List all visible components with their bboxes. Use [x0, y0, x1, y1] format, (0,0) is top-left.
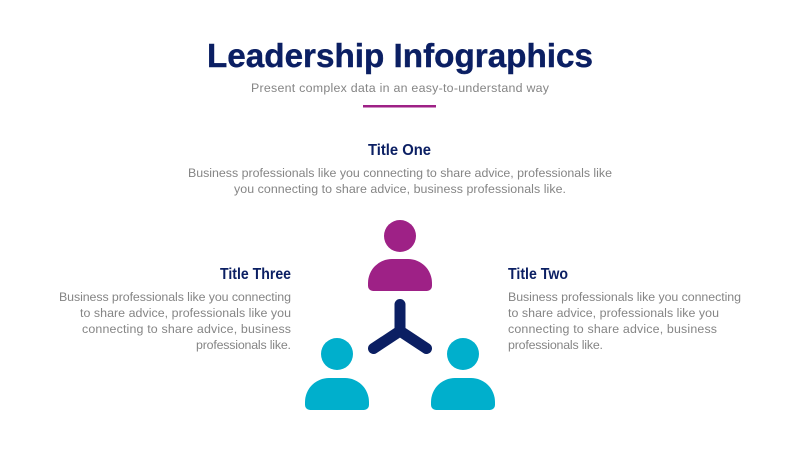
subtitle: Present complex data in an easy-to-understand way [251, 81, 550, 95]
icon: connector [374, 304, 426, 348]
body: title two: connecting to share advice, business [508, 322, 717, 336]
body: title two: professionals like. [508, 338, 603, 352]
accent divider [363, 105, 436, 108]
icon: top person [368, 220, 432, 291]
text block: title one [188, 142, 612, 196]
heading: title two: Title Two [508, 266, 568, 283]
body: title two [508, 290, 741, 352]
title: Leadership Infographics [207, 37, 593, 74]
body: title three: to share advice, professionals like you [80, 306, 291, 320]
body: title three: professionals like. [196, 338, 291, 352]
body: title three: Business professionals like you connecting [59, 290, 291, 304]
body: title three: connecting to share advice, business [82, 322, 291, 336]
icon: right person [431, 338, 495, 410]
body: title one [188, 166, 612, 196]
heading: title three: Title Three [220, 266, 291, 283]
icon: left person [305, 338, 369, 410]
body: title one: Business professionals like you connecting to share advice, professionals like [188, 166, 612, 180]
body: title one: you connecting to share advice, business professionals like. [234, 182, 566, 196]
heading: title one: Title One [368, 142, 431, 159]
body: title two: to share advice, professionals like you [508, 306, 719, 320]
body: title three [59, 290, 291, 352]
body: title two: Business professionals like you connecting [508, 290, 741, 304]
text block: title two [508, 266, 741, 352]
text block: title three [59, 266, 291, 352]
